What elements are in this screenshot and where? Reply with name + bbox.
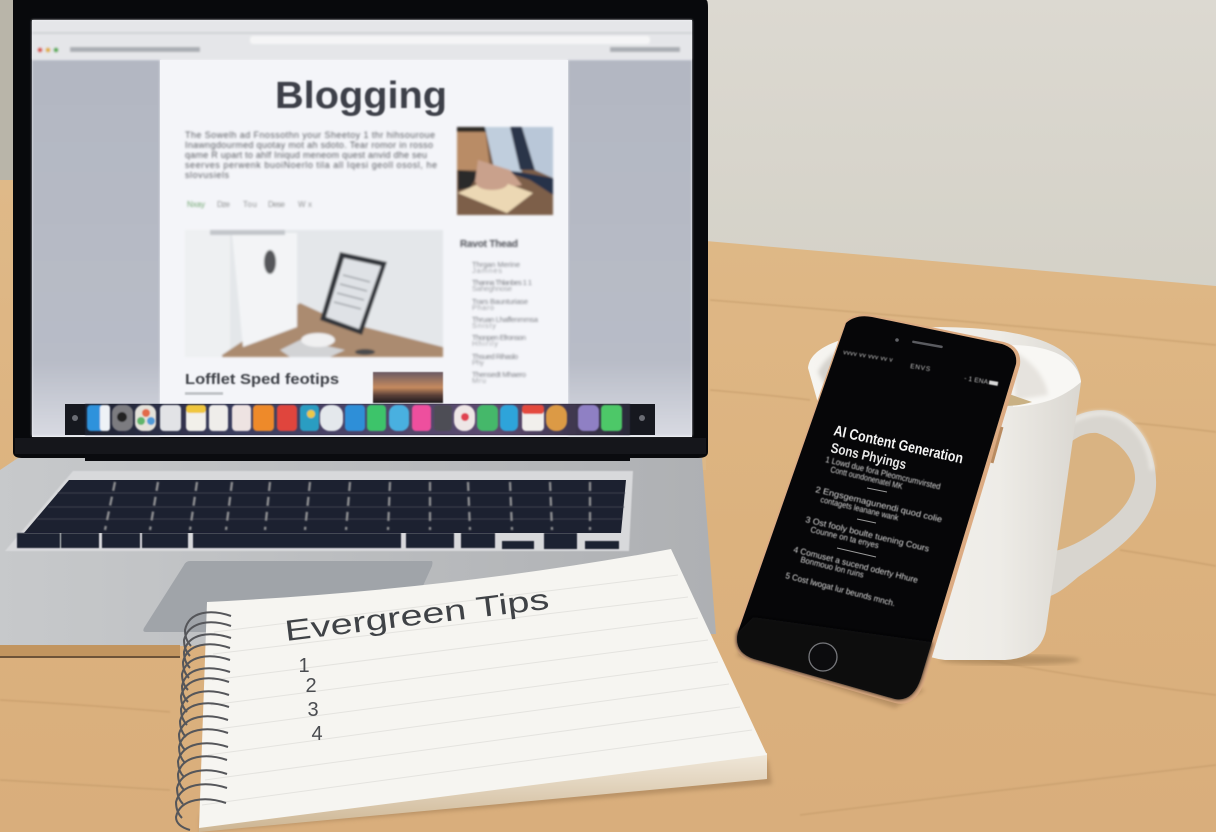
sidebar list: Thsued Rihaslo bbox=[472, 352, 518, 361]
sidebar list: Snisty bbox=[472, 321, 496, 330]
tag row: Dese bbox=[268, 200, 286, 209]
home button bbox=[809, 643, 837, 671]
notebook page bbox=[199, 549, 767, 828]
phone list: Bonmouo lon ruins bbox=[800, 554, 865, 580]
laptop lid bezel bbox=[13, 0, 708, 458]
photo: tablet on desk bbox=[185, 230, 443, 357]
status bar: vvvv vv vvv vv v bbox=[843, 349, 894, 364]
handwritten numbers: 1 bbox=[298, 655, 310, 677]
wall bbox=[0, 0, 1216, 300]
mug handle bbox=[1035, 410, 1156, 598]
handwritten numbers: 2 bbox=[305, 675, 317, 697]
tag row: Nxay bbox=[187, 200, 205, 209]
phone frame bbox=[735, 314, 1020, 704]
phone lower band bbox=[737, 617, 932, 699]
tag row: Wx bbox=[298, 200, 312, 209]
notebook bbox=[176, 549, 772, 832]
sidebar list: Thrgan Merine bbox=[472, 260, 520, 269]
phone list: Contt oundonenatel MK bbox=[830, 464, 904, 491]
side panels bbox=[32, 60, 160, 436]
handwritten numbers: 4 bbox=[311, 723, 323, 745]
tag row bbox=[187, 200, 312, 209]
coffee mug bbox=[808, 327, 1156, 665]
article text: Inawngdourmed quotay mot ah sdoto. Tear romor in rosso bbox=[185, 140, 433, 150]
sidebar list: Pharo bbox=[472, 303, 494, 312]
sidebar list: Jamnes bbox=[472, 266, 502, 275]
ruled lines bbox=[202, 575, 752, 805]
blog page bbox=[160, 60, 568, 434]
article text: slovusiels bbox=[185, 170, 230, 180]
article text bbox=[185, 130, 437, 180]
trackpad bbox=[143, 561, 433, 632]
phone face bbox=[737, 316, 1016, 699]
sidebar list: Mru bbox=[472, 376, 486, 385]
phone list: Counne on ta enyes bbox=[810, 524, 880, 550]
spiral binding bbox=[176, 612, 231, 830]
tag row: Tou bbox=[243, 200, 257, 209]
sidebar list: Thensedt Mhaero bbox=[472, 370, 526, 379]
status bar: ENVS bbox=[910, 363, 931, 373]
sidebar list: Hhirily bbox=[472, 339, 498, 348]
handwritten numbers bbox=[298, 655, 323, 745]
sidebar list: Trars Baunturiase bbox=[472, 297, 528, 306]
status bar bbox=[843, 349, 998, 386]
sidebar list: Thruan Lhaffenmmsa bbox=[472, 315, 539, 324]
laptop screen bbox=[32, 20, 692, 437]
photo: writing hands bbox=[457, 127, 553, 215]
mug body bbox=[808, 327, 1081, 660]
mug interior bbox=[818, 342, 1081, 407]
keyboard bbox=[5, 471, 633, 551]
sunset thumbnail bbox=[373, 372, 443, 403]
sidebar list: Phy bbox=[472, 358, 484, 367]
article text: seerves perwenk buoiNoerlo tila all Iqesi geoll ososl, he bbox=[185, 160, 437, 170]
heading: Blogging: Blogging bbox=[275, 75, 447, 117]
sidebar list: Thonpen Efronson bbox=[472, 333, 526, 342]
phone subtitle: Sons Phyings bbox=[829, 439, 908, 472]
heading: Evergreen Tips: Evergreen Tips bbox=[283, 584, 551, 648]
phone shadow bbox=[736, 640, 925, 708]
status bar: - 1 ENA bbox=[964, 375, 989, 386]
notebook page edge bbox=[199, 753, 767, 832]
article text: qame R upart to ahlf Iniqud meneom quest anvid dhe seu bbox=[185, 150, 427, 160]
browser toolbar bbox=[32, 20, 692, 60]
laptop base bbox=[0, 458, 716, 658]
dock bbox=[65, 404, 655, 435]
wooden table bbox=[0, 180, 1216, 832]
sidebar list: Thanna Thlanbes 1 1 bbox=[472, 278, 532, 287]
sidebar list bbox=[460, 239, 539, 385]
subheading caption bbox=[185, 392, 223, 395]
bottom key row bbox=[17, 533, 619, 549]
phone bbox=[735, 314, 1020, 708]
laptop bbox=[0, 0, 716, 658]
phone list: 4 Comuset a sucend oderty Hhure bbox=[793, 544, 919, 585]
phone list: 5 Cost lwogat lur beunds mnch. bbox=[784, 570, 896, 608]
handwritten numbers: 3 bbox=[307, 699, 319, 721]
phone list: 2 Engsgemagunendi quod colie bbox=[815, 484, 944, 524]
mug shadow bbox=[940, 655, 1080, 665]
sidebar list: Saheghnose bbox=[472, 284, 512, 293]
subheading: Lofflet Sped feotips bbox=[185, 371, 339, 388]
phone list: 1 Lowd due fora Pleomcrumvirsted bbox=[825, 454, 942, 492]
phone title: AI Content Generation bbox=[832, 422, 965, 467]
side button bbox=[992, 427, 1002, 463]
notebook shadow bbox=[200, 760, 772, 832]
speaker and camera bbox=[895, 338, 943, 348]
sidebar list: Ravot Thead bbox=[460, 239, 518, 250]
article text: The Sowelh ad Fnossothn your Sheetoy 1 thr hihsouroue bbox=[185, 130, 435, 140]
phone list: contagets leanane wank bbox=[820, 494, 900, 523]
tag row: Dze bbox=[217, 200, 231, 209]
phone list: 3 Ost fooly boulte tuening Cours bbox=[805, 514, 930, 554]
phone dividers bbox=[837, 488, 887, 557]
phone list bbox=[784, 454, 944, 608]
